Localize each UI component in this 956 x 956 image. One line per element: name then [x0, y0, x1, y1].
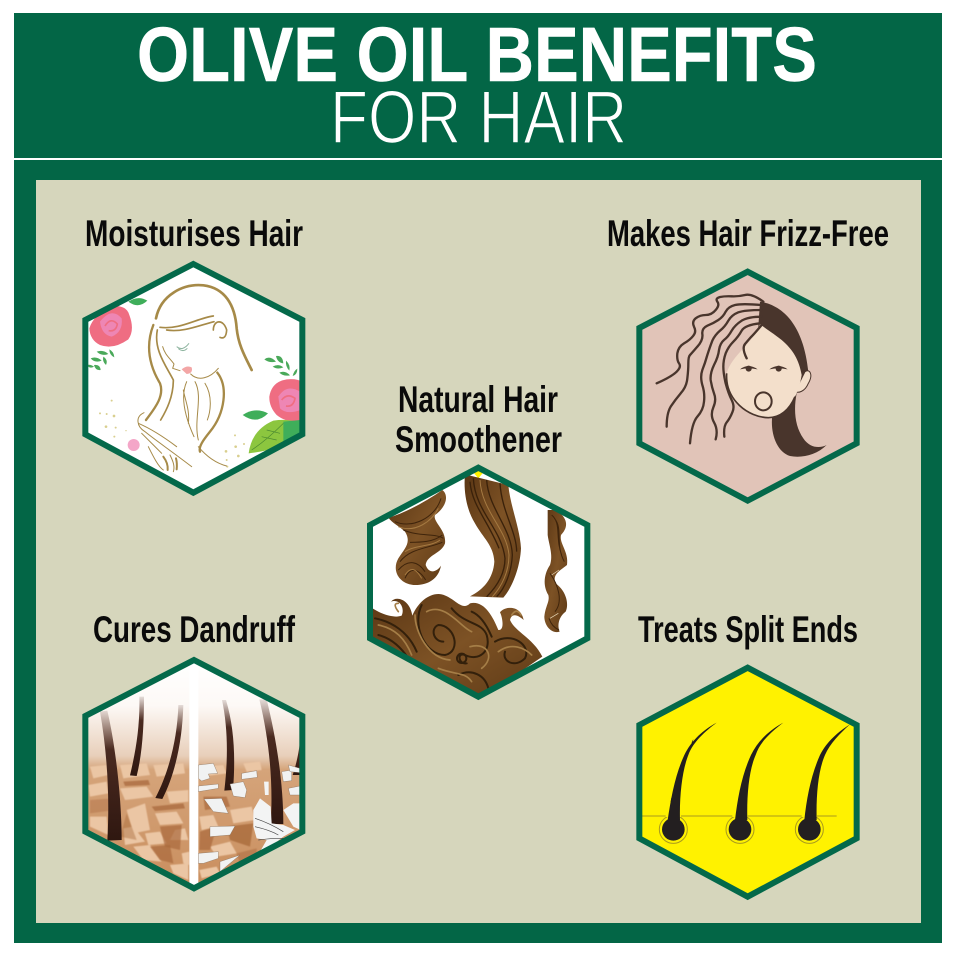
title: OLIVE OIL BENEFITS: [137, 13, 817, 98]
top-left wave: [388, 490, 446, 585]
heading: Natural Hair Smoothener: Smoothener: [395, 419, 562, 460]
heading: Natural Hair Smoothener: [395, 379, 562, 460]
icon: woman with flowing hair and roses: [85, 264, 303, 493]
skin cells: [88, 762, 262, 880]
title: [137, 13, 817, 159]
right curl: [544, 510, 567, 632]
face: [727, 324, 802, 418]
icon: hair follicles with split ends: [639, 668, 857, 897]
heading: Cures Dandruff: Cures Dandruff: [93, 609, 295, 650]
title: FOR HAIR: [330, 74, 627, 159]
icon: brown hair styles: [370, 468, 587, 698]
straight hair on the right: [758, 302, 827, 457]
content panel: [36, 180, 921, 923]
heading: Natural Hair Smoothener: Natural Hair: [398, 379, 558, 420]
icon: scalp with dandruff flakes: [85, 650, 302, 893]
bottom curly mass: [370, 594, 542, 698]
hair shafts: [100, 711, 122, 841]
white flakes: [198, 763, 300, 872]
centre straight lock: [465, 474, 521, 598]
curly strands: [657, 295, 763, 383]
heading: Treats Split Ends: Treats Split Ends: [638, 609, 858, 650]
heading: Moisturises Hair: Moisturises Hair: [85, 213, 303, 254]
white divider band: [189, 701, 198, 885]
header divider line: [14, 158, 942, 160]
icon: woman with frizzy hair: [639, 272, 857, 501]
